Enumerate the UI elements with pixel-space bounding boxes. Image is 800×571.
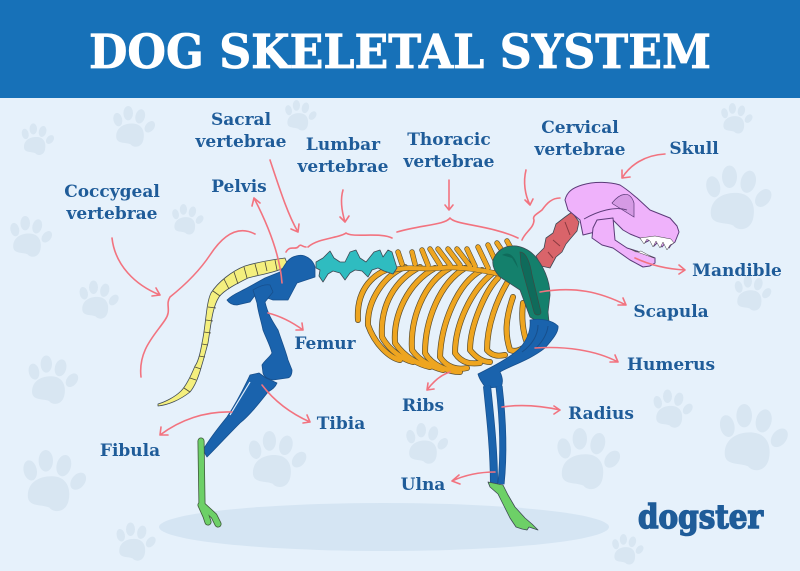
teeth — [630, 236, 674, 258]
label: cervical vertebrae: Cervical — [541, 118, 619, 138]
cervical arrow — [525, 170, 533, 205]
fibula arrow — [160, 412, 232, 435]
radius arrow — [502, 406, 560, 414]
label: scapula: Scapula — [633, 302, 709, 322]
label: sacral vertebrae: vertebrae — [194, 132, 287, 152]
label: fibula: Fibula — [100, 441, 160, 461]
label: skull: Skull — [669, 139, 719, 159]
scapula arrow — [540, 290, 626, 305]
skull — [565, 182, 679, 267]
background paw prints — [9, 100, 791, 565]
tibia arrow — [262, 385, 310, 423]
label: ulna: Ulna — [401, 475, 445, 495]
tibia and fibula — [203, 373, 277, 457]
cervical vertebrae — [536, 212, 579, 268]
label: mandible: Mandible — [692, 261, 782, 281]
logo: dogster: dogster — [638, 497, 764, 536]
femur arrow — [268, 313, 303, 330]
skull arrow — [622, 154, 665, 178]
ribs arrow — [427, 372, 450, 390]
mandible arrow — [635, 258, 685, 274]
label: sacral vertebrae: Sacral — [211, 110, 271, 130]
coccygeal bracket — [141, 231, 255, 377]
label: coccygeal vertebrae: Coccygeal — [64, 182, 160, 202]
pelvis — [227, 255, 315, 305]
sacral arrow — [270, 160, 299, 232]
front foot — [488, 482, 538, 530]
lumbar bracket — [308, 233, 392, 247]
scapula — [493, 246, 550, 322]
lumbar arrow — [340, 190, 349, 222]
humerus — [478, 319, 558, 388]
cervical bracket — [522, 198, 560, 240]
dog skeleton — [158, 182, 679, 530]
ulna arrow — [452, 472, 495, 484]
label: ribs: Ribs — [402, 396, 444, 416]
label: radius: Radius — [568, 404, 634, 424]
jaw — [592, 218, 655, 267]
label: humerus: Humerus — [627, 355, 715, 375]
ground shadow — [159, 503, 609, 551]
coccygeal arrow — [112, 238, 160, 296]
lumbar vertebrae — [316, 250, 397, 282]
coccygeal vertebrae — [158, 258, 288, 406]
label: femur: Femur — [294, 334, 357, 354]
label: pelvis: Pelvis — [211, 177, 267, 197]
label: lumbar vertebrae: Lumbar — [306, 135, 380, 155]
label: thoracic vertebrae: vertebrae — [402, 152, 495, 172]
radius and ulna — [487, 386, 503, 484]
label: lumbar vertebrae: vertebrae — [296, 157, 389, 177]
label: thoracic vertebrae: Thoracic — [407, 130, 491, 150]
title: DOG SKELETAL SYSTEM — [89, 25, 711, 80]
thoracic arrow — [445, 180, 453, 210]
label: tibia: Tibia — [317, 414, 365, 434]
label: coccygeal vertebrae: vertebrae — [66, 204, 158, 224]
title banner — [0, 0, 800, 98]
sacral bracket — [286, 245, 306, 252]
thoracic bracket — [397, 218, 518, 238]
ribs — [358, 267, 527, 372]
thoracic vertebrae — [393, 241, 512, 274]
humerus arrow — [535, 348, 618, 362]
pointer lines — [112, 154, 685, 484]
eye socket — [612, 194, 634, 217]
hind foot — [201, 441, 218, 524]
pelvis arrow — [252, 198, 282, 283]
label: cervical vertebrae: vertebrae — [534, 140, 626, 160]
femur — [253, 285, 292, 380]
